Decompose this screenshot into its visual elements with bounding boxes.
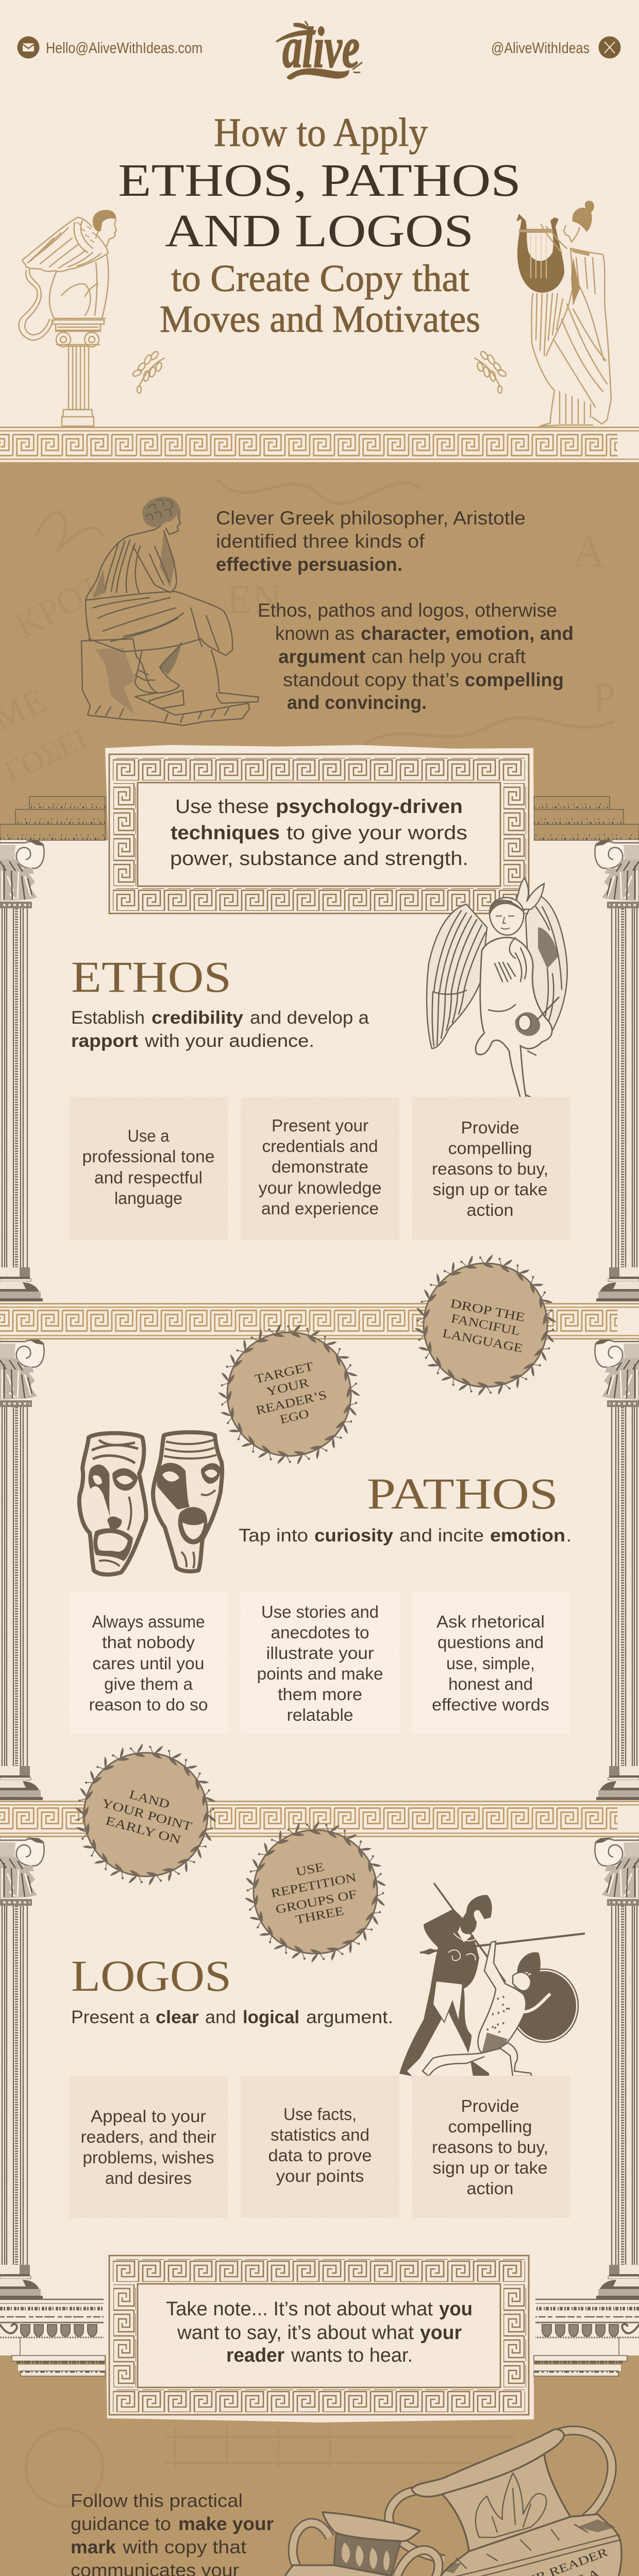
column: left 1 bbox=[0, 840, 44, 1301]
text: closing guidance bbox=[71, 2490, 274, 2576]
logos card 3: compelling bbox=[448, 2117, 532, 2136]
text: logos intro: Present a bbox=[71, 2007, 150, 2027]
callout: psychology-driven techniques bbox=[105, 745, 534, 918]
header: email contact: Hello@AliveWithIdeas.com bbox=[46, 40, 203, 57]
pathos card 1: reason to do so bbox=[89, 1695, 208, 1714]
ethos card 1: language bbox=[114, 1189, 182, 1208]
decorative band: Greek key 2 bbox=[0, 1303, 639, 1340]
pathos card 1: that nobody bbox=[102, 1633, 195, 1652]
badge: land your point early on: EARLY ON bbox=[104, 1814, 182, 1847]
intro text: character, emotion, argument: argument bbox=[278, 646, 365, 667]
pathos card 3: effective words bbox=[432, 1695, 549, 1714]
logos card 1: and desires bbox=[105, 2168, 192, 2188]
text: ethos intro: and develop a bbox=[250, 1008, 369, 1028]
column: right 2 bbox=[595, 1338, 639, 1800]
column: right 1 bbox=[595, 840, 639, 1301]
body bbox=[476, 938, 552, 1109]
header: X handle: @AliveWithIdeas bbox=[491, 40, 590, 57]
callout: take note: wants to hear. bbox=[291, 2345, 413, 2366]
text: closing guidance: with copy that bbox=[122, 2536, 246, 2557]
badge: use repetition groups of three: THREE bbox=[295, 1904, 345, 1927]
illustration: sphinx on column bbox=[19, 210, 116, 426]
text: ethos intro: credibility bbox=[152, 1008, 244, 1028]
badge: drop the fanciful language: DROP THE bbox=[449, 1297, 526, 1325]
ethos card 3 bbox=[412, 1097, 570, 1240]
tragedy mask bbox=[79, 1433, 146, 1574]
text: pathos intro: curiosity bbox=[314, 1526, 394, 1546]
pathos card 2 bbox=[241, 1592, 399, 1734]
faint manuscript lettering: upper panel bbox=[0, 479, 615, 789]
ethos card 2 bbox=[241, 1097, 399, 1240]
pathos card 3: honest and bbox=[448, 1674, 533, 1693]
logos card 3: sign up or take bbox=[433, 2158, 547, 2177]
text: pathos intro: and incite bbox=[399, 1526, 484, 1546]
logos card 2: Use facts, bbox=[283, 2105, 357, 2124]
badge: use repetition groups of three: REPETITION bbox=[270, 1871, 358, 1901]
logos card 2: data to prove bbox=[268, 2146, 372, 2165]
intro text: three kinds of persuasion: identified three kinds of bbox=[216, 531, 425, 552]
illustration: seated Aristotle statue bbox=[81, 497, 259, 725]
intro text: character, emotion, argument: and convincing. bbox=[287, 692, 427, 713]
right wing bbox=[526, 894, 567, 1034]
pathos card 2: points and make bbox=[257, 1664, 383, 1683]
temple steps: left bbox=[0, 796, 105, 840]
left wing bbox=[427, 904, 487, 1048]
badge: target your reader's ego: YOUR bbox=[265, 1376, 310, 1399]
faint manuscript lettering: upper panel: ΕΝ bbox=[227, 577, 282, 622]
ethos card 1: professional tone bbox=[82, 1147, 214, 1166]
ethos card 3: sign up or take bbox=[433, 1180, 547, 1199]
vase: make your reader feel like it's a good idea bbox=[389, 2429, 639, 2576]
temple steps: right bbox=[534, 796, 639, 840]
badge: target your reader's ego: READER’S bbox=[255, 1388, 328, 1418]
text: pathos intro bbox=[239, 1526, 571, 1546]
badge: drop the fanciful language: FANCIFUL bbox=[450, 1312, 522, 1338]
text: ethos intro: with your audience. bbox=[144, 1031, 314, 1051]
pathos card 2: anecdotes to bbox=[271, 1623, 369, 1642]
badge: target your reader's ego: TARGET bbox=[254, 1360, 315, 1386]
header: X handle bbox=[491, 36, 620, 59]
pathos card 3: use, simple, bbox=[446, 1654, 535, 1673]
pathos card 1: cares until you bbox=[93, 1654, 204, 1673]
ethos card 3: reasons to buy, bbox=[432, 1159, 548, 1178]
warrior kneeling with shield bbox=[423, 1941, 578, 2076]
head bbox=[490, 897, 524, 935]
title: How to Apply bbox=[214, 110, 428, 155]
pathos card 3 bbox=[412, 1592, 570, 1734]
header: Alive logo bbox=[276, 16, 362, 80]
faint manuscript lettering: upper panel: ΚΡΟΤ bbox=[8, 567, 110, 646]
badge: land your point early on: LAND bbox=[128, 1788, 171, 1811]
decorative band: Greek key 3 bbox=[0, 1801, 639, 1837]
pathos card 2: them more bbox=[278, 1685, 362, 1704]
intro text: character, emotion, argument bbox=[258, 600, 574, 713]
ethos card 2: Present your bbox=[272, 1116, 368, 1135]
callout: take note: Take note... It’s not about what bbox=[166, 2298, 433, 2320]
faint manuscript lettering: upper panel: Ρ bbox=[593, 675, 615, 720]
badge: drop the fanciful language: LANGUAGE bbox=[441, 1327, 524, 1355]
title: ETHOS, PATHOS bbox=[118, 155, 521, 206]
intro text: character, emotion, argument: can help you craft bbox=[372, 646, 526, 667]
callout: take note bbox=[104, 2251, 534, 2422]
badge: drop the fanciful language bbox=[414, 1255, 557, 1396]
ethos card 3: compelling bbox=[448, 1139, 532, 1158]
illustration: battling Greek warriors bbox=[399, 1883, 585, 2076]
spears bbox=[420, 1883, 585, 1982]
icon: envelope bbox=[18, 36, 39, 59]
text: ethos intro: Establish bbox=[71, 1008, 145, 1028]
callout: take note: reader bbox=[226, 2345, 284, 2366]
intro text: three kinds of persuasion: Clever Greek philosopher, Aristotle bbox=[216, 507, 526, 529]
callout: take note: your bbox=[420, 2322, 462, 2344]
column: left 2 bbox=[0, 1338, 44, 1800]
heading: PATHOS: PATHOS bbox=[367, 1469, 558, 1518]
logos card 3 bbox=[412, 2076, 570, 2218]
warrior attacking bbox=[399, 1895, 492, 2076]
logos card 1: problems, wishes bbox=[82, 2148, 214, 2167]
pathos card 2: relatable bbox=[287, 1705, 354, 1724]
intro text: character, emotion, argument: character, emotion, and bbox=[361, 623, 574, 644]
callout: psychology-driven techniques: psychology-driven bbox=[276, 796, 463, 818]
background: lower tan panel bbox=[0, 2355, 639, 2576]
header: Alive logo: alive bbox=[282, 16, 360, 80]
logos card 1: Appeal to your bbox=[91, 2107, 206, 2126]
intro text: character, emotion, argument: compelling bbox=[465, 669, 564, 690]
logos card 2: your points bbox=[276, 2166, 364, 2185]
ethos card 2: your knowledge bbox=[259, 1178, 381, 1197]
text: pathos intro: . bbox=[566, 1526, 571, 1546]
faint manuscript lettering: upper panel: Α bbox=[572, 526, 606, 577]
title bbox=[118, 110, 521, 341]
text: logos intro: and bbox=[205, 2007, 236, 2027]
background: upper tan panel bbox=[0, 462, 639, 840]
logos card 3: reasons to buy, bbox=[432, 2138, 548, 2157]
laurel sprig bbox=[515, 878, 544, 909]
badge: use repetition groups of three: USE bbox=[295, 1860, 325, 1879]
text: closing guidance: mark bbox=[71, 2536, 116, 2557]
comedy mask bbox=[153, 1432, 222, 1571]
badge: use repetition groups of three bbox=[218, 1795, 412, 1989]
pathos card 1: Always assume bbox=[92, 1612, 205, 1631]
pathos card 2: Use stories and bbox=[261, 1602, 379, 1621]
text: logos intro bbox=[71, 2007, 393, 2027]
faint manuscript lettering: upper panel: ΓΟΣΕΙ bbox=[0, 721, 92, 789]
text: closing guidance: Follow this practical bbox=[71, 2490, 243, 2511]
text: logos intro: clear bbox=[156, 2007, 199, 2027]
intro text: character, emotion, argument: known as bbox=[275, 623, 355, 644]
ethos card 2: and experience bbox=[261, 1199, 379, 1218]
callout: psychology-driven techniques: Use these bbox=[175, 796, 269, 818]
ethos card 3: Provide bbox=[461, 1118, 519, 1137]
heading: LOGOS: LOGOS bbox=[71, 1951, 231, 2001]
column: right 3 bbox=[595, 1837, 639, 2299]
ethos card 1: Use a bbox=[128, 1126, 170, 1145]
badge: land your point early on bbox=[65, 1735, 226, 1894]
temple entablature: left bbox=[0, 2299, 105, 2376]
logos card 3: Provide bbox=[461, 2096, 519, 2115]
pathos card 3: questions and bbox=[438, 1633, 544, 1652]
text: logos intro: argument. bbox=[306, 2007, 393, 2027]
text: closing guidance: guidance to bbox=[71, 2513, 171, 2534]
illustration: woman playing lyre bbox=[516, 201, 611, 426]
faint manuscript marks: lower panel bbox=[15, 2427, 639, 2576]
ethos card 3: action bbox=[467, 1200, 513, 1219]
pathos card 1 bbox=[69, 1592, 228, 1734]
pathos card 1: give them a bbox=[104, 1674, 193, 1693]
badge: land your point early on: YOUR POINT bbox=[100, 1797, 194, 1834]
column: left 3 bbox=[0, 1837, 44, 2299]
badge: target your reader's ego bbox=[198, 1303, 380, 1485]
logos card 2: statistics and bbox=[271, 2125, 369, 2144]
title: to Create Copy that bbox=[171, 258, 469, 300]
callout: psychology-driven techniques: to give your words bbox=[287, 822, 467, 844]
ethos card 1: and respectful bbox=[94, 1168, 203, 1187]
intro text: character, emotion, argument: standout copy that’s bbox=[283, 669, 459, 690]
title: Moves and Motivates bbox=[160, 298, 480, 341]
badge: target your reader's ego: EGO bbox=[279, 1407, 310, 1427]
logos card 1 bbox=[69, 2076, 228, 2218]
title: AND LOGOS bbox=[165, 206, 474, 257]
pathos card 2: illustrate your bbox=[266, 1643, 374, 1663]
text: closing guidance: make your bbox=[178, 2513, 274, 2534]
callout: psychology-driven techniques: techniques bbox=[171, 822, 280, 844]
text: ethos intro bbox=[71, 1008, 369, 1051]
intro text: character, emotion, argument: Ethos, pathos and logos, otherwise bbox=[258, 600, 557, 621]
text: ethos intro: rapport bbox=[71, 1031, 138, 1051]
icon: left laurel sprig bbox=[132, 350, 164, 393]
pathos card 3: Ask rhetorical bbox=[436, 1612, 545, 1631]
vase: never ask a question your reader could say no to bbox=[273, 2512, 439, 2576]
text: pathos intro: emotion bbox=[490, 1526, 565, 1546]
intro text: three kinds of persuasion: effective persuasion. bbox=[216, 554, 402, 575]
ethos card 2: credentials and bbox=[262, 1137, 378, 1156]
callout: take note: you bbox=[439, 2298, 473, 2320]
logos card 3: action bbox=[467, 2179, 513, 2198]
icon: right laurel sprig bbox=[475, 350, 507, 393]
icon: X bbox=[599, 36, 620, 59]
intro text: three kinds of persuasion bbox=[216, 507, 526, 575]
illustration: theatre masks bbox=[79, 1432, 222, 1574]
callout: psychology-driven techniques: power, substance and strength. bbox=[170, 848, 468, 870]
ethos card 2: demonstrate bbox=[272, 1157, 368, 1176]
heading: ETHOS: ETHOS bbox=[71, 952, 231, 1002]
logos card 2 bbox=[241, 2076, 399, 2218]
ethos card 1 bbox=[69, 1097, 228, 1240]
illustration: cherub with laurel bbox=[427, 878, 567, 1109]
callout: take note: want to say, it’s about what bbox=[177, 2322, 414, 2344]
badge: use repetition groups of three: GROUPS OF bbox=[275, 1888, 358, 1917]
logos card 1: readers, and their bbox=[80, 2127, 216, 2146]
text: pathos intro: Tap into bbox=[239, 1526, 308, 1546]
header: email contact bbox=[18, 36, 203, 59]
decorative band: Greek key 1 bbox=[0, 427, 639, 460]
temple entablature: right bbox=[534, 2299, 639, 2376]
text: logos intro: logical bbox=[243, 2007, 299, 2027]
